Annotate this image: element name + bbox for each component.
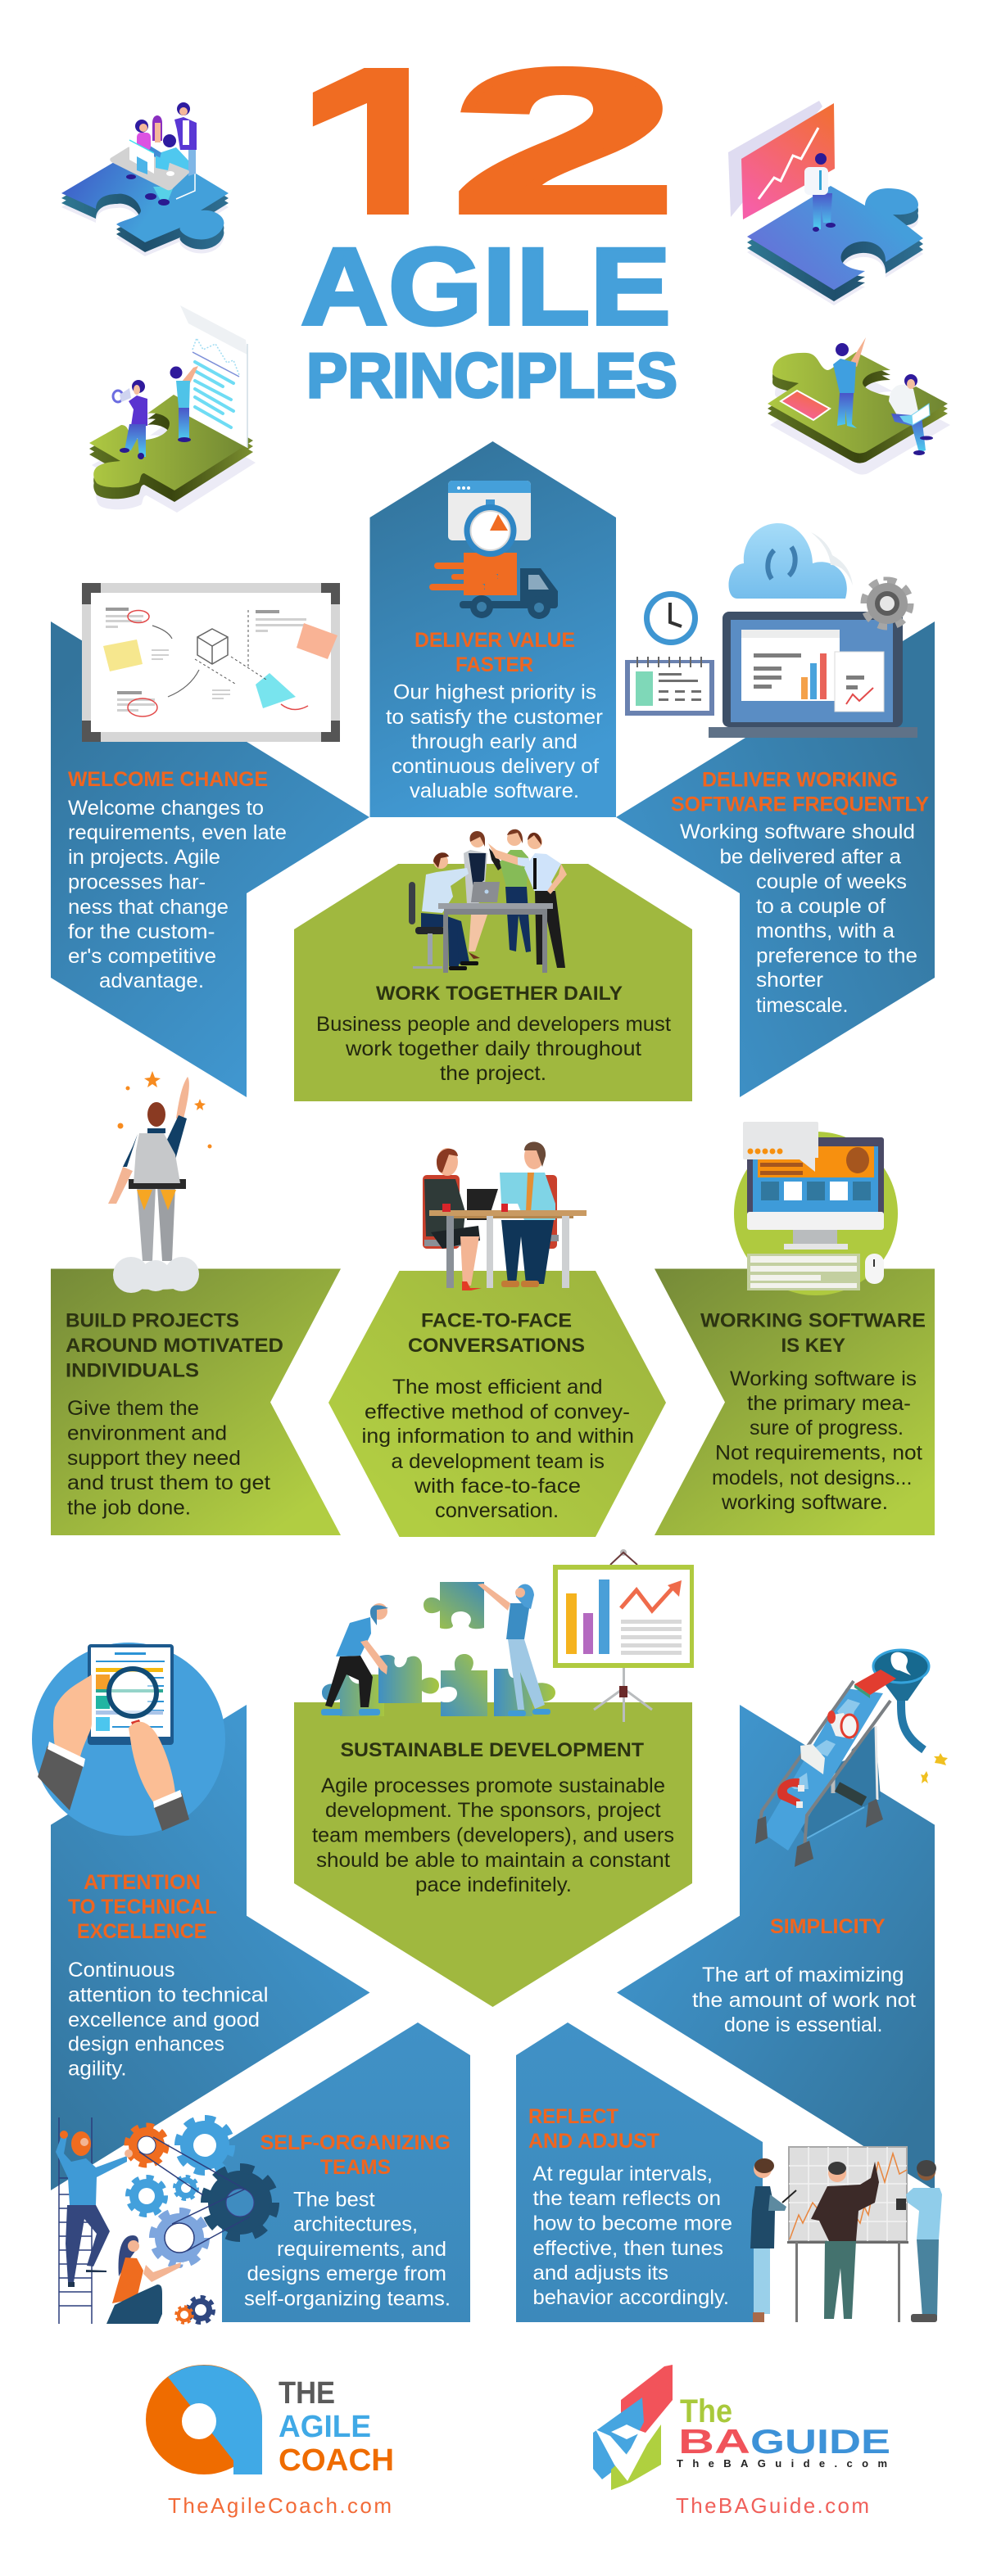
- gear: big blue: [179, 2119, 231, 2172]
- body text: team members (developers), and users: [312, 1824, 674, 1846]
- body text: agility.: [68, 2057, 127, 2080]
- heading: SUSTAINABLE DEVELOPMENT: [341, 1739, 644, 1761]
- body text: The best: [293, 2188, 375, 2211]
- body text: conversation.: [435, 1499, 559, 1522]
- body text: and adjusts its: [532, 2262, 668, 2285]
- body text: The most efficient and: [392, 1376, 603, 1399]
- body text: [316, 1013, 671, 1085]
- body text: in projects. Agile: [68, 846, 220, 869]
- title word agile: AGILE: [301, 226, 671, 348]
- icon: woman with puzzle piece: [478, 1584, 550, 1716]
- body text: shorter: [756, 969, 823, 992]
- body text: attention to technical: [68, 1983, 269, 2006]
- body text: processes har-: [68, 871, 206, 894]
- logo mark: [593, 2365, 673, 2490]
- body text: [362, 1376, 634, 1522]
- icon: man with puzzle piece: [321, 1603, 388, 1715]
- panel: reflect and adjust: [516, 2022, 942, 2322]
- body text: models, not designs...: [712, 1467, 913, 1489]
- heading: ATTENTION: [84, 1871, 201, 1894]
- body text: self-organizing teams.: [244, 2288, 451, 2311]
- panel shape: [616, 621, 935, 1097]
- heading: REFLECT: [528, 2105, 618, 2128]
- logo wordmark: The: [680, 2393, 732, 2429]
- logo wordmark: THE: [279, 2376, 335, 2411]
- body text: requirements, even late: [68, 821, 287, 844]
- logo mark: [146, 2365, 262, 2474]
- body text: design enhances: [68, 2032, 224, 2055]
- panel: deliver working software frequently: [616, 523, 935, 1097]
- logo wordmark: GUIDE: [750, 2422, 890, 2461]
- body text: the project.: [440, 1062, 546, 1085]
- body text: months, with a: [756, 920, 895, 942]
- icon: green puzzle piece with presenters: [89, 305, 256, 513]
- body text: how to become more: [532, 2212, 732, 2235]
- body text: architectures,: [293, 2213, 418, 2236]
- body text: sure of progress.: [750, 1417, 904, 1439]
- panel: working software is key: [655, 1122, 935, 1535]
- heading: TEAMS: [320, 2156, 391, 2179]
- body text: [312, 1774, 674, 1896]
- body text: ness that change: [68, 896, 229, 919]
- heading: [68, 1871, 217, 1943]
- heading: DELIVER WORKING: [702, 769, 898, 792]
- body text: working software.: [721, 1491, 888, 1514]
- body text: Business people and developers must: [316, 1013, 671, 1036]
- panel shape: [51, 1269, 341, 1535]
- heading: [671, 769, 929, 816]
- heading: AND ADJUST: [528, 2130, 659, 2153]
- body text: Give them the: [67, 1397, 199, 1420]
- heading: IS KEY: [781, 1335, 845, 1357]
- title word principles: PRINCIPLES: [306, 341, 677, 411]
- body text: ing information to and within: [362, 1425, 634, 1448]
- gear: orange: [127, 2126, 166, 2165]
- heading: BUILD PROJECTS: [66, 1310, 239, 1332]
- body text: Agile processes promote sustainable: [321, 1774, 665, 1797]
- panel shape: [655, 1269, 935, 1535]
- icon: puzzle team and chart board: [321, 1549, 694, 1722]
- body text: [68, 797, 287, 992]
- heading: [528, 2105, 659, 2153]
- body text: Continuous: [68, 1959, 175, 1982]
- title number 12: 1: [301, 29, 457, 259]
- heading: EXCELLENCE: [77, 1920, 206, 1943]
- panel: deliver value faster: [370, 441, 616, 817]
- gear: medium blue: [128, 2177, 165, 2215]
- body text: effective, then tunes: [532, 2237, 723, 2260]
- panel: self-organizing teams: [56, 2022, 470, 2324]
- icon: team with gears and ladder: [56, 2117, 274, 2324]
- body text: Our highest priority is: [393, 681, 596, 704]
- body text: [386, 681, 603, 802]
- body text: a development team is: [392, 1450, 605, 1473]
- icon: team at chart board: [750, 2147, 942, 2322]
- body text: designs emerge from: [247, 2262, 446, 2285]
- body text: with face-to-face: [414, 1475, 581, 1498]
- icon: two people at a desk: [423, 1142, 587, 1290]
- body text: the amount of work not: [692, 1989, 916, 2012]
- gear: dark: [206, 2168, 274, 2237]
- heading: [260, 2131, 451, 2179]
- icon: team high five: [409, 829, 567, 973]
- logo wordmark: [677, 2393, 890, 2470]
- heading: DELIVER VALUE: [414, 629, 575, 652]
- logo: the agile coach: [146, 2365, 394, 2518]
- body text: [712, 1367, 922, 1514]
- heading: FASTER: [455, 653, 533, 676]
- link: theagilecoach.com: TheAgileCoach.com: [168, 2493, 392, 2518]
- body text: couple of weeks: [756, 870, 907, 893]
- link: thebaguide.com: TheBAGuide.com: [676, 2493, 869, 2518]
- icon: green puzzle piece with two people: [768, 337, 950, 475]
- heading: FACE-TO-FACE: [421, 1310, 572, 1332]
- body text: environment and: [67, 1421, 227, 1444]
- body text: [67, 1397, 270, 1520]
- title: [301, 66, 677, 399]
- panel shape: [294, 1702, 692, 2007]
- body text: [532, 2162, 732, 2309]
- icon: stopwatch and delivery truck: [429, 481, 558, 619]
- body text: behavior accordingly.: [532, 2286, 729, 2309]
- gear: light blue: [152, 2211, 206, 2265]
- heading: INDIVIDUALS: [66, 1359, 199, 1382]
- panel shape: [617, 1705, 935, 2190]
- body text: the primary mea-: [747, 1392, 911, 1415]
- body text: development. The sponsors, project: [325, 1799, 661, 1822]
- body text: to a couple of: [756, 895, 886, 918]
- logo wordmark: COACH: [279, 2443, 394, 2478]
- heading: SELF-ORGANIZING: [260, 2131, 451, 2154]
- person: man on ladder: [56, 2131, 133, 2287]
- body text: done is essential.: [724, 2013, 883, 2036]
- panel: welcome change: [51, 583, 369, 1097]
- heading: TO TECHNICAL: [68, 1896, 217, 1918]
- body text: excellence and good: [68, 2009, 260, 2031]
- heading: [700, 1310, 926, 1357]
- heading: [66, 1310, 283, 1382]
- title number 12: [313, 66, 667, 215]
- heading: WORK TOGETHER DAILY: [376, 983, 623, 1005]
- panel: work together daily: [294, 829, 692, 1101]
- panel shape: [328, 1271, 666, 1537]
- body text: be delivered after a: [719, 846, 901, 869]
- heading: WORKING SOFTWARE: [700, 1310, 926, 1332]
- logo wordmark: [279, 2376, 394, 2478]
- panel: simplicity: [617, 1650, 948, 2190]
- gear: small navy: [188, 2298, 213, 2322]
- panel shape: [51, 1705, 370, 2190]
- body text: The art of maximizing: [702, 1964, 904, 1986]
- icon: blue puzzle piece with team: [61, 102, 229, 256]
- icon: hands holding tablet and magnifier: [32, 1643, 225, 1836]
- panel shape: [222, 2022, 470, 2322]
- body text: the job done.: [67, 1497, 191, 1520]
- body text: preference to the: [756, 945, 917, 968]
- icon: puzzle pieces: [322, 1582, 555, 1716]
- body text: the team reflects on: [532, 2187, 721, 2210]
- gear: small orange: [176, 2307, 193, 2323]
- body text: Working software is: [730, 1367, 917, 1390]
- body text: Not requirements, not: [715, 1442, 922, 1465]
- logo wordmark: TheBAGuide.com: [677, 2457, 887, 2470]
- panel shape: [294, 864, 692, 1101]
- body text: [244, 2188, 451, 2311]
- heading: WELCOME CHANGE: [68, 768, 268, 791]
- body text: Working software should: [680, 820, 915, 843]
- icon: blue puzzle piece with chart sign: [728, 101, 923, 305]
- body text: Welcome changes to: [68, 797, 264, 820]
- icon: whiteboard: [82, 583, 340, 742]
- heading: CONVERSATIONS: [408, 1335, 585, 1357]
- icon: person with jetpack: [108, 1071, 211, 1293]
- panel shape: [516, 2022, 763, 2322]
- heading: AROUND MOTIVATED: [66, 1335, 283, 1357]
- body text: [68, 1959, 269, 2080]
- panel: face-to-face conversations: [328, 1142, 666, 1537]
- body text: At regular intervals,: [532, 2162, 713, 2185]
- body text: timescale.: [756, 994, 849, 1017]
- gear: small blue: [174, 2176, 197, 2199]
- chart board: [553, 1549, 694, 1722]
- body text: [692, 1964, 916, 2036]
- body text: through early and: [411, 730, 578, 753]
- body text: continuous delivery of: [392, 755, 599, 778]
- body text: and trust them to get: [67, 1471, 270, 1494]
- body text: should be able to maintain a constant: [316, 1849, 670, 1872]
- heading: SIMPLICITY: [770, 1915, 886, 1938]
- body text: advantage.: [99, 969, 204, 992]
- heading: [408, 1310, 585, 1357]
- heading: [414, 629, 575, 676]
- icon: cloud laptop clock calendar: [625, 523, 917, 738]
- body text: pace indefinitely.: [415, 1873, 572, 1896]
- body text: for the custom-: [68, 920, 215, 943]
- icon: desktop computer: [734, 1122, 898, 1295]
- logo wordmark: AGILE: [279, 2410, 371, 2444]
- panel: sustainable development: [294, 1549, 694, 2007]
- logo: the ba guide: [593, 2365, 890, 2518]
- body text: [680, 820, 917, 1017]
- body text: support they need: [67, 1447, 241, 1470]
- panel: build projects around motivated individuals: [51, 1071, 341, 1535]
- title number 12: 2: [451, 27, 677, 255]
- heading: SOFTWARE FREQUENTLY: [671, 793, 929, 816]
- panel: attention to technical excellence: [32, 1643, 370, 2190]
- body text: to satisfy the customer: [386, 706, 603, 729]
- panel shape: [51, 621, 369, 1097]
- icon: conveyor belt and funnel: [755, 1650, 948, 1867]
- logo wordmark: BA: [678, 2422, 750, 2461]
- body text: effective method of convey-: [365, 1400, 630, 1423]
- body text: requirements, and: [277, 2238, 446, 2261]
- body text: er's competitive: [68, 945, 216, 968]
- person: kneeling woman: [106, 2235, 181, 2324]
- body text: valuable software.: [410, 780, 579, 802]
- panel shape: [370, 441, 616, 817]
- body text: work together daily throughout: [345, 1037, 641, 1060]
